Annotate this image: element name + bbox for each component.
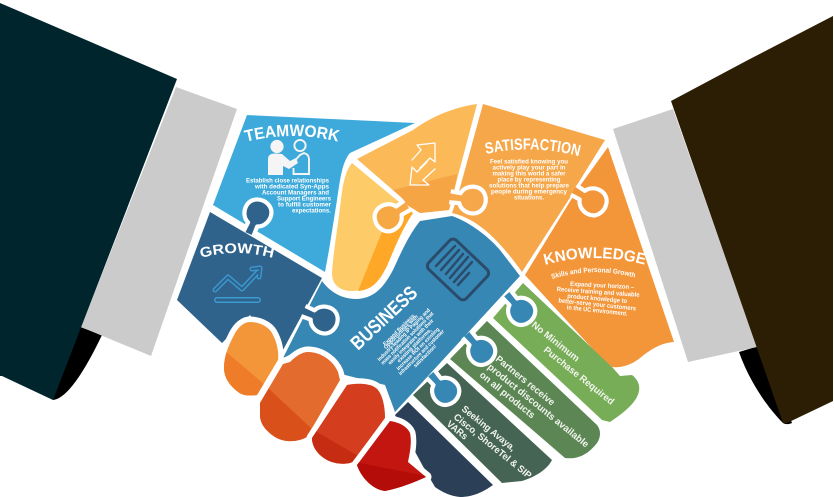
knowledge body text: in the UC environment. (566, 304, 628, 318)
business body text (372, 303, 453, 384)
panel: knowledge (525, 147, 674, 368)
business body text: satisfaction! (413, 344, 438, 369)
business body text: easily integrates with their (387, 318, 436, 366)
panel: business (283, 216, 520, 412)
business heading: BUSINESS (346, 282, 422, 355)
satisfaction body text: people during emergency (491, 188, 567, 196)
knowledge body text: product knowledge to (567, 293, 627, 305)
finger 1 (215, 322, 278, 400)
growth heading: GROWTH (200, 243, 274, 258)
teamwork body text: Establish close relationships (246, 178, 329, 184)
no minimum text: No Minimum (529, 320, 581, 364)
puzzle knob: business into no minimum (497, 285, 540, 330)
no minimum text: Purchase Required (541, 345, 616, 408)
panel: navy finger strip (395, 402, 493, 497)
puzzle knob: arrows piece into satisfaction (448, 184, 488, 215)
knowledge body text: better-serve your customers (558, 297, 637, 313)
teamwork body text (246, 178, 331, 214)
satisfaction body text: solutions that help prepare (489, 182, 569, 190)
right sleeve (613, 16, 833, 424)
icon: two-way arrows (410, 143, 435, 185)
seeking partners text: Cisco, ShoreTel & SIP (451, 412, 534, 482)
satisfaction body text: making this world a safer (492, 170, 566, 178)
business body text: Opportunities with (383, 314, 420, 351)
panel: yellow palm (332, 163, 413, 291)
puzzle knob: business into seeking (421, 365, 464, 410)
knowledge body text: Expand your horizon – (570, 281, 635, 291)
puzzle knob: growth into business (298, 299, 342, 337)
puzzle knob: business into partners (457, 325, 500, 370)
business body text: existing platforms, (396, 327, 434, 364)
icon: rising chart (215, 268, 260, 300)
satisfaction body text: actively play your part in (492, 164, 566, 172)
finger 3 (305, 384, 385, 470)
business body text: mass notification solutions that (380, 311, 435, 366)
teamwork body text: Support Engineers (277, 196, 331, 202)
knowledge body text (556, 281, 640, 318)
panel: teamwork (213, 115, 415, 272)
knowledge heading: KNOWLEDGE (543, 247, 645, 265)
business body text: infrastructure and customer (398, 328, 447, 377)
no minimum text (529, 320, 616, 408)
satisfaction body text: situations. (514, 194, 544, 202)
partner discounts text: product discounts available (485, 362, 591, 450)
satisfaction heading: SATISFACTION (485, 138, 581, 156)
knowledge body text: Receive training and valuable (556, 286, 640, 299)
panel: growth (177, 212, 322, 350)
business body text: Expand Business (382, 313, 416, 347)
panel: seeking partners (413, 363, 552, 483)
puzzle knob: arrows piece into palm (370, 194, 414, 236)
seeking partners text: VARs (444, 419, 470, 442)
partner discounts text: on all products (477, 370, 537, 421)
left sleeve (0, 3, 237, 400)
business body text: increase ROI on existing (396, 327, 441, 372)
teamwork body text: to fulfill customer (278, 202, 331, 208)
satisfaction body text: Feel satisfied knowing you (490, 158, 568, 166)
satisfaction body text: place by representing (498, 176, 561, 184)
knowledge subheading: Skills and Personal Growth (551, 268, 636, 279)
business body text: industry-leading IP Paging and (377, 308, 432, 363)
teamwork body text: expectations. (292, 208, 331, 214)
puzzle knob: growth into teamwork (236, 195, 275, 239)
seeking partners text: Seeking Avaya, (459, 404, 518, 454)
icon: tablet (425, 237, 491, 302)
puzzle knob: into knowledge (567, 179, 611, 220)
partner discounts text: Partners receive (493, 354, 557, 408)
panel: satisfaction (452, 104, 605, 272)
panel: partner discounts (450, 321, 600, 458)
panel: no minimum purchase (493, 283, 639, 422)
finger 4 (350, 421, 426, 495)
panel: arrows piece (357, 104, 477, 213)
teamwork body text: with dedicated Syn-Apps (254, 184, 329, 190)
teamwork heading: TEAMWORK (244, 124, 340, 142)
icon: handshake (268, 140, 309, 175)
satisfaction body text (489, 158, 569, 202)
finger 2 (250, 352, 340, 445)
teamwork body text: Account Managers and (262, 190, 329, 196)
